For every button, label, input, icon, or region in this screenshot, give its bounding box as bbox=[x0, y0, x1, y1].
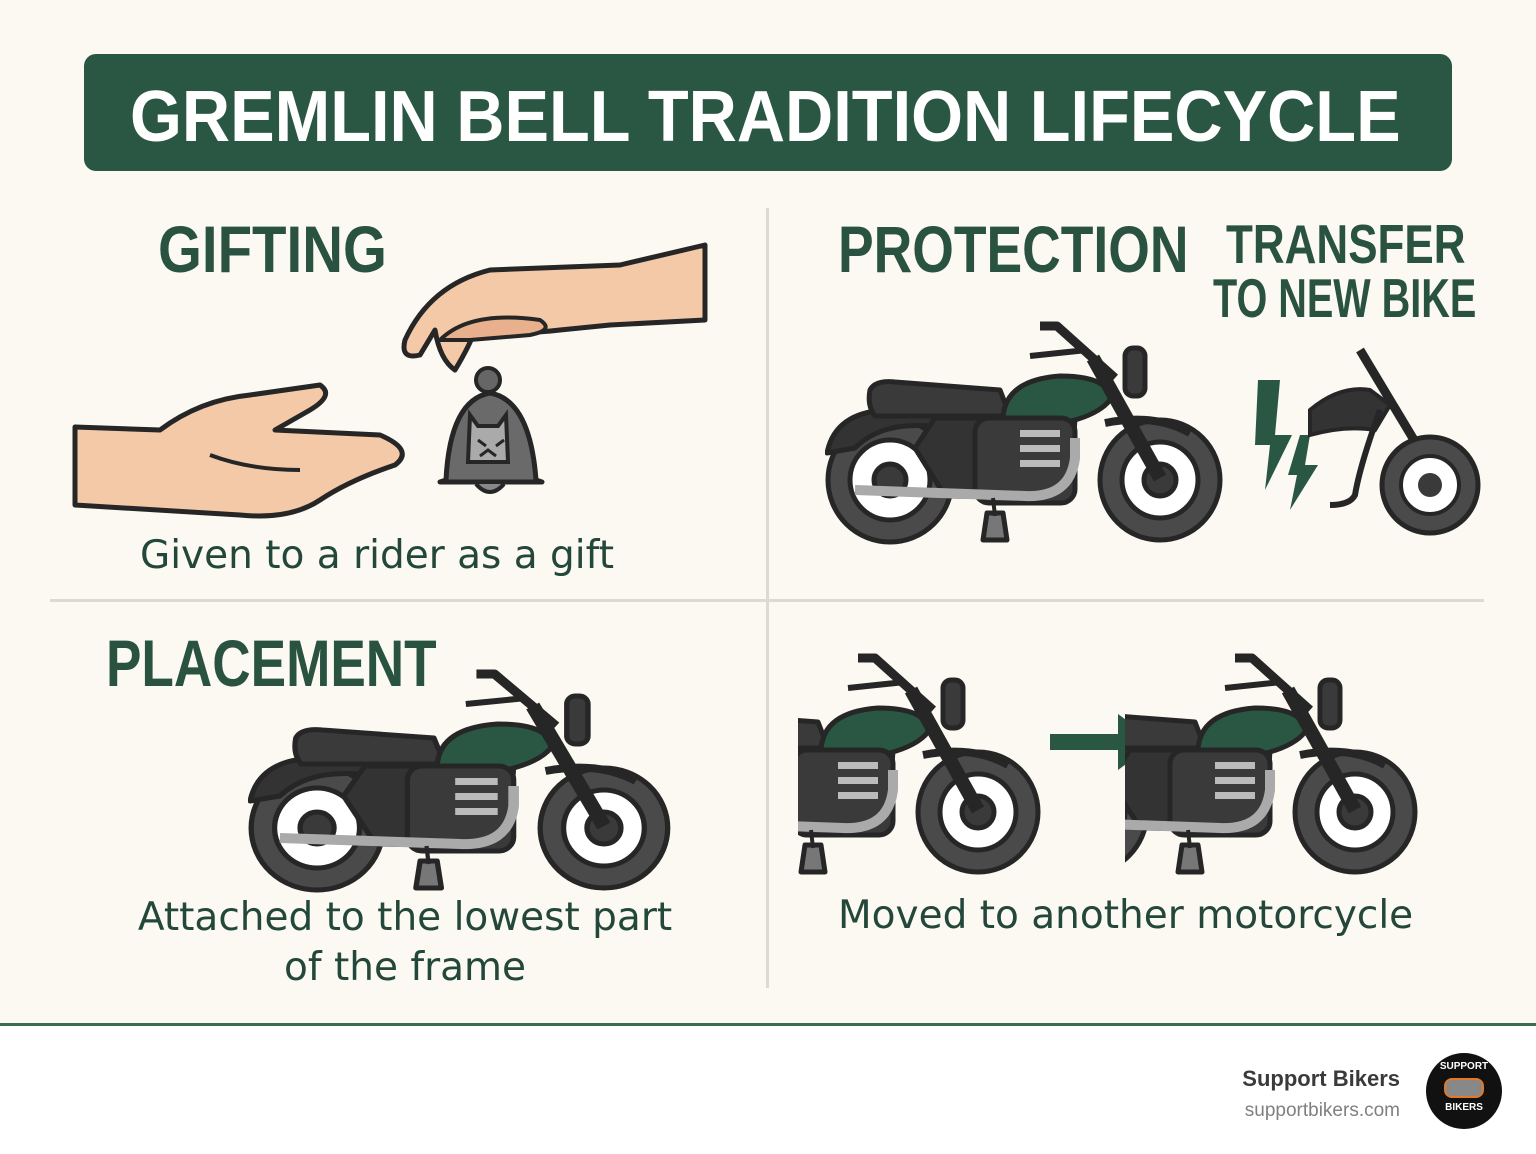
caption: transfer: Moved to another motorcycle bbox=[838, 893, 1413, 938]
caption: placement: Attached to the lowest part bbox=[138, 895, 672, 940]
panel: transfer bbox=[798, 654, 1418, 938]
title banner bbox=[84, 54, 1452, 171]
heading: gifting: GIFTING bbox=[158, 212, 387, 286]
logo: BIKERS bbox=[1445, 1102, 1483, 1113]
panel: protection bbox=[825, 212, 1480, 544]
heading: transfer to new bike bbox=[1213, 213, 1476, 329]
footer brand text bbox=[1242, 1066, 1400, 1121]
heading: transfer to new bike: TO NEW BIKE bbox=[1213, 267, 1476, 329]
vertical divider bbox=[766, 208, 769, 988]
caption: placement bbox=[138, 895, 672, 990]
arrow bbox=[1050, 714, 1125, 770]
illustration: hands with bell bbox=[72, 242, 708, 518]
logo: SUPPORT bbox=[1440, 1061, 1488, 1072]
heading: protection: PROTECTION bbox=[838, 212, 1188, 286]
footer brand text: supportbikers.com bbox=[1245, 1100, 1400, 1121]
illustration: motorcycle with bell bbox=[825, 322, 1222, 544]
illustration: motorcycle with bell at lowest frame bbox=[248, 670, 670, 892]
panel: gifting bbox=[72, 212, 708, 578]
heading: transfer to new bike: TRANSFER bbox=[1226, 213, 1466, 275]
heading: placement: PLACEMENT bbox=[106, 626, 437, 700]
illustration: old motorcycle bbox=[798, 654, 1040, 874]
horizontal divider bbox=[50, 599, 1484, 602]
footer brand text: Support Bikers bbox=[1242, 1066, 1400, 1091]
title banner: GREMLIN BELL TRADITION LIFECYCLE bbox=[130, 77, 1401, 157]
caption: placement: of the frame bbox=[284, 945, 526, 990]
logo bbox=[1426, 1053, 1502, 1129]
caption: gifting: Given to a rider as a gift bbox=[140, 533, 614, 578]
icon: lightning bolts and broken bike bbox=[1255, 348, 1480, 536]
illustration: new motorcycle bbox=[1125, 654, 1418, 874]
footer bbox=[0, 1023, 1536, 1154]
panel: placement bbox=[106, 626, 672, 990]
